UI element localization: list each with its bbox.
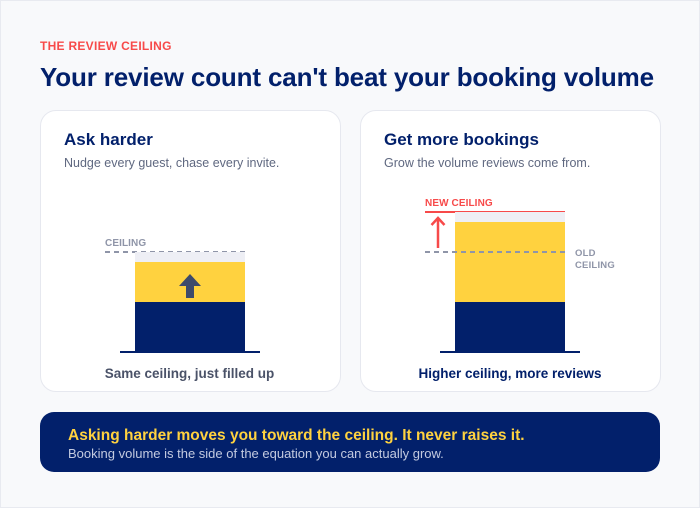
panel caption: ask harder: Same ceiling, just filled up (105, 366, 274, 381)
callout headline: Asking harder moves you toward the ceiling. It never raises it. (68, 427, 525, 444)
bar segment: reviews filled (135, 262, 245, 302)
panel heading: ask harder: Ask harder (64, 130, 153, 149)
callout subtext: Booking volume is the side of the equation you can actually grow. (68, 446, 444, 461)
baseline (440, 351, 580, 353)
panel description: get more bookings: Grow the volume reviews come from. (384, 156, 590, 170)
title: Your review count can't beat your booking volume (40, 62, 654, 92)
chart: raised ceiling bar (425, 198, 615, 353)
eyebrow label: THE REVIEW CEILING (40, 39, 172, 53)
bar segment: headroom (135, 252, 245, 262)
old ceiling label: OLD (575, 248, 596, 259)
ceiling label: CEILING (105, 238, 146, 249)
arrow: ceiling raised (432, 218, 444, 248)
bar segment: reviews (455, 222, 565, 302)
icon: up arrow (179, 274, 201, 298)
old ceiling label: CEILING (575, 260, 615, 271)
callout banner (40, 412, 660, 472)
new ceiling line (425, 211, 565, 213)
chart: same ceiling bar (105, 238, 260, 353)
panel: ask harder (40, 110, 341, 392)
old ceiling dashed line (425, 251, 565, 253)
baseline (120, 351, 260, 353)
panel: get more bookings (360, 110, 661, 392)
panel description: ask harder: Nudge every guest, chase every invite. (64, 156, 279, 170)
ceiling dashed line (105, 251, 245, 253)
bar segment: bookings base (455, 302, 565, 352)
new ceiling label: NEW CEILING (425, 198, 493, 209)
panel heading: get more bookings: Get more bookings (384, 130, 539, 149)
panel caption: get more bookings: Higher ceiling, more reviews (418, 366, 602, 381)
bar segment: headroom (455, 212, 565, 222)
bar segment: bookings base (135, 302, 245, 352)
